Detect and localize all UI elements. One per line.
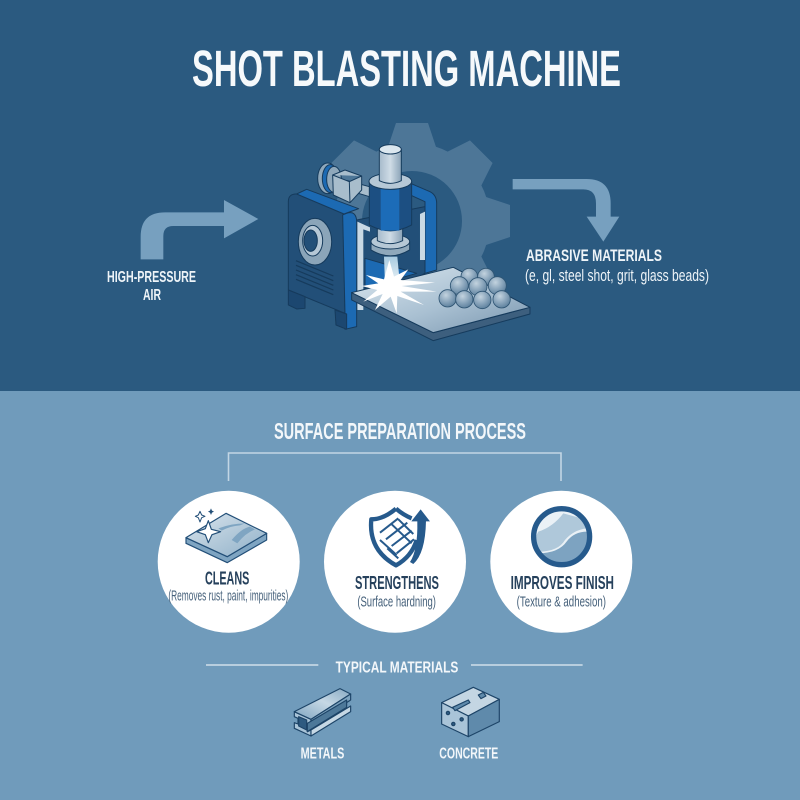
icon: metal beam [294,689,351,736]
machine inner light frame [357,212,425,310]
machine blue base [365,258,417,288]
panel: improves finish [490,491,632,633]
icon: shield with arrow [371,509,430,565]
machine inner opening [357,207,425,310]
text: strengthens [355,572,439,611]
text: strengthens: (Surface hardning) [357,595,436,611]
machine legs [288,290,347,329]
icon: concrete block [442,687,499,737]
column neck [377,225,403,244]
machine vents [296,261,333,295]
text: strengthens: STRENGTHENS [355,572,439,593]
icon: background gear [326,123,510,319]
machine front blue edge [343,213,357,329]
label: abrasive materials: ABRASIVE MATERIALS [526,246,662,265]
column collar [369,173,412,189]
machine motor cube [333,170,362,203]
work plate [352,267,530,341]
text: improves finish [511,572,614,611]
panel: top background [0,0,800,391]
abrasive shot pile [439,268,510,309]
label: abrasive materials [525,246,709,285]
machine top blue edge [297,189,359,214]
column top cylinder [379,145,401,183]
heading: typical materials: TYPICAL MATERIALS [336,660,459,677]
text: cleans: (Removes rust, paint, impurities) [168,589,288,605]
machine left panel [288,194,345,313]
label: concrete: CONCRETE [439,745,499,762]
panel: cleans [158,491,300,633]
text: improves finish: (Texture & adhesion) [517,595,606,611]
column housing [369,182,412,231]
arrow: high-pressure air [141,200,258,259]
panel: strengthens [324,491,466,633]
text: cleans [168,567,288,605]
machine motor rod [347,181,372,197]
label: metals: METALS [301,745,345,762]
label: high-pressure air: AIR [143,287,161,304]
arrow: abrasive materials [513,179,619,242]
text: cleans: CLEANS [205,567,249,588]
machine motor disc [318,163,341,194]
text: improves finish: IMPROVES FINISH [511,572,614,593]
icon: polished ring [534,509,590,565]
machine porthole [298,218,332,265]
icon: clean slab [186,508,267,563]
panel: bottom background [0,391,800,800]
label: abrasive materials: (e, gl, steel shot, grit, glass beads) [525,266,709,285]
heading: surface preparation process: SURFACE PREPARATION PROCESS [274,418,526,444]
label: high-pressure air [107,269,196,304]
blast spray [384,257,401,292]
blast starburst [362,260,437,313]
bracket connector [228,453,561,481]
column flange [371,234,410,256]
machine rear frame [407,182,437,273]
label: high-pressure air: HIGH-PRESSURE [107,269,196,286]
illustration: shot blasting machine [288,145,530,341]
